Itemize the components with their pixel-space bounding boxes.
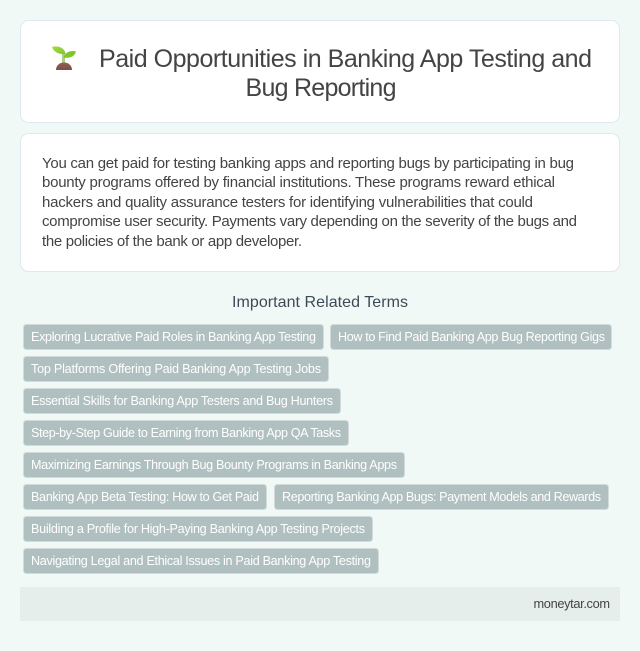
intro paragraph: compromise user security. Payments vary depending on the severity of the bugs and [42,213,577,230]
icon: seedling [52,46,76,70]
tag: Building a Profile for High-Paying Banking App Testing Projects [31,522,365,536]
tag: Step-by-Step Guide to Earning from Banking App QA Tasks [31,426,341,440]
tag: Maximizing Earnings Through Bug Bounty Programs in Banking Apps [31,458,397,472]
intro paragraph: You can get paid for testing banking apps and reporting bugs by participating in bug [42,155,574,172]
tag [24,388,340,414]
tag [24,484,266,510]
tag: Essential Skills for Banking App Testers and Bug Hunters [31,394,333,408]
intro paragraph: bounty programs offered by financial institutions. These programs reward ethical [42,174,555,191]
tag: Exploring Lucrative Paid Roles in Banking App Testing [31,330,316,344]
tag [24,548,378,574]
title: Bug Reporting [246,74,396,102]
tag [24,516,372,542]
tag: How to Find Paid Banking App Bug Reporting Gigs [338,330,605,344]
tag: Reporting Banking App Bugs: Payment Models and Rewards [282,490,601,504]
title [99,45,592,102]
intro paragraph [42,155,577,250]
related terms heading: Important Related Terms [232,294,408,311]
tag [274,484,608,510]
footer bar [20,587,620,621]
tag: Banking App Beta Testing: How to Get Paid [31,490,259,504]
intro paragraph: hackers and quality assurance testers for identifying vulnerabilities that could [42,194,533,211]
header panel [20,20,620,122]
intro paragraph: the policies of the bank or app developer. [42,233,302,250]
tag: Top Platforms Offering Paid Banking App Testing Jobs [31,362,321,376]
tag [24,324,324,350]
tag [24,420,348,446]
tag [24,452,404,478]
tag: Navigating Legal and Ethical Issues in Paid Banking App Testing [31,554,371,568]
tag [330,324,612,350]
related terms tag list [24,324,612,574]
footer source: moneytar.com [534,596,610,611]
intro text panel [20,134,620,272]
tag [24,356,328,382]
title: Paid Opportunities in Banking App Testing and [99,45,592,73]
